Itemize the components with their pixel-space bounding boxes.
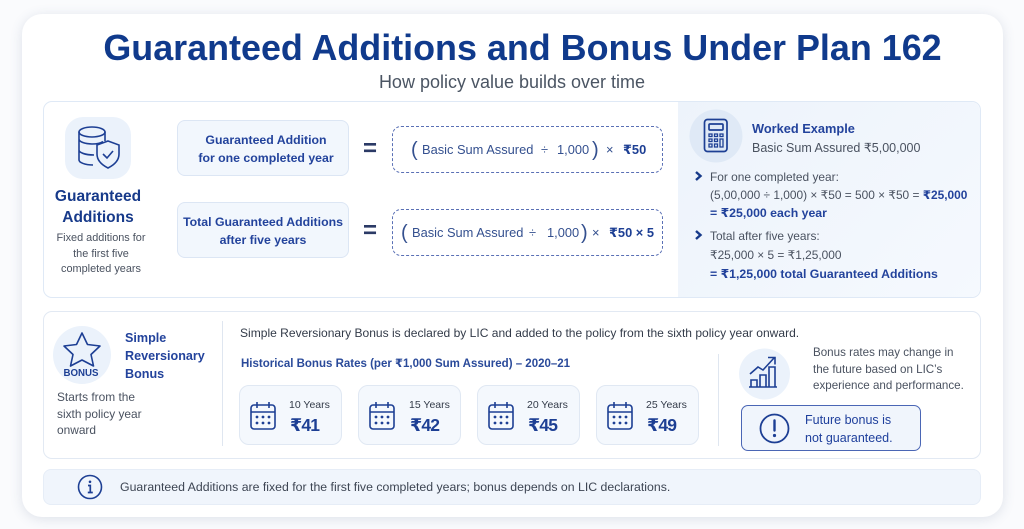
text: five year working: = ₹1,25,000 total Guaranteed Additions <box>710 266 938 280</box>
text: bonus declaration: Simple Reversionary Bonus is declared by LIC and added to the policy from the sixth policy year onward. <box>240 326 799 340</box>
label: total guaranteed additions: after five years <box>220 233 306 247</box>
formula: five years: 1,000 <box>547 225 579 240</box>
tile: 15 years: ₹42 <box>410 415 439 435</box>
text: fixed additions description: Fixed additions for <box>56 232 146 244</box>
text: footer message: Guaranteed Additions are fixed for the first five completed years; bonus depends on LIC declarations. <box>120 480 670 494</box>
heading: guaranteed additions: Additions <box>62 209 134 226</box>
icon: bonus star: BONUS <box>64 368 99 379</box>
text: starts from sixth year: sixth policy year <box>57 406 142 420</box>
heading: guaranteed additions: Guaranteed <box>55 188 141 205</box>
formula: one year: 1,000 <box>557 142 589 157</box>
text: basic sum assured: Basic Sum Assured ₹5,00,000 <box>752 141 920 155</box>
heading: simple reversionary bonus: Reversionary <box>125 349 205 363</box>
equals sign one: = <box>363 135 377 162</box>
icon: calculator <box>690 110 742 162</box>
formula: one year: ( <box>411 139 418 161</box>
heading: worked example: Worked Example <box>752 121 855 136</box>
formula: one year: × <box>606 142 614 157</box>
icon: database with shield <box>65 117 131 179</box>
text: starts from sixth year: onward <box>57 423 96 437</box>
text: one year working: (5,00,000 ÷ 1,000) × ₹50 = 500 × ₹50 = ₹25,000 <box>710 188 967 202</box>
text: fixed additions description <box>56 232 146 275</box>
heading: historical bonus rates: Historical Bonus Rates (per ₹1,000 Sum Assured) – 2020–21 <box>241 358 570 370</box>
icon: info <box>78 474 102 500</box>
panel: simple reversionary bonus <box>43 311 981 459</box>
text: one year working: = ₹25,000 each year <box>710 206 827 220</box>
heading: simple reversionary bonus: Bonus <box>125 367 164 381</box>
tile: 25 years: 25 Years <box>646 399 687 411</box>
icon: chevron two <box>695 230 702 240</box>
text: bonus rates may change: experience and performance. <box>813 379 964 392</box>
tile: 20 years <box>477 385 580 445</box>
formula: one year <box>392 126 663 173</box>
text: starts from sixth year <box>57 390 142 437</box>
icon: growth chart <box>739 348 790 400</box>
heading: simple reversionary bonus: Simple <box>125 331 166 345</box>
tile: 20 years: ₹45 <box>528 415 557 435</box>
text: one year working <box>710 170 967 220</box>
label: guaranteed addition one year <box>177 120 349 176</box>
tile: 10 years: ₹41 <box>290 415 319 435</box>
formula: five years: ( <box>401 222 408 244</box>
text: bonus rates may change <box>813 346 964 392</box>
formula: five years <box>392 209 663 256</box>
formula: one year: ₹50 <box>623 142 646 157</box>
tile: 15 years: 15 Years <box>409 399 450 411</box>
text: five year working: Total after five years: <box>710 228 820 242</box>
text: fixed additions description: the first five <box>73 248 129 260</box>
heading: simple reversionary bonus <box>125 331 205 381</box>
formula: one year: ) <box>592 139 599 161</box>
tile: 20 years: 20 Years <box>527 399 568 411</box>
formula: five years: × <box>592 225 600 240</box>
formula: five years: ) <box>581 222 588 244</box>
tile: 25 years: ₹49 <box>647 415 676 435</box>
formula: one year: ÷ <box>541 142 548 157</box>
heading: guaranteed additions <box>55 188 141 226</box>
title: Guaranteed Additions and Bonus Under Plan 162 <box>103 28 942 68</box>
tile: 15 years <box>358 385 461 445</box>
formula: five years: ÷ <box>529 225 536 240</box>
equals sign two: = <box>363 217 377 244</box>
callout: future bonus not guaranteed <box>741 405 921 451</box>
text: callout message: not guaranteed. <box>805 430 893 444</box>
text: starts from sixth year: Starts from the <box>57 390 135 404</box>
subtitle: How policy value builds over time <box>379 72 645 92</box>
footer note bar <box>43 469 981 505</box>
panel: guaranteed additions <box>43 101 981 298</box>
text: callout message: Future bonus is <box>805 413 891 427</box>
icon: bonus star <box>53 326 111 384</box>
text: callout message <box>805 413 893 444</box>
icon: exclamation <box>760 414 790 444</box>
text: one year working: For one completed year: <box>710 170 839 184</box>
tile: 10 years: 10 Years <box>289 399 330 411</box>
label: guaranteed addition one year: for one completed year <box>198 151 334 165</box>
label: total guaranteed additions: Total Guaranteed Additions <box>183 215 343 229</box>
text: five year working: ₹25,000 × 5 = ₹1,25,000 <box>710 248 842 262</box>
formula: five years: Basic Sum Assured <box>412 225 523 240</box>
text: bonus rates may change: Bonus rates may change in <box>813 346 954 359</box>
formula: five years: ₹50 × 5 <box>609 225 654 240</box>
text: fixed additions description: completed years <box>61 263 141 275</box>
text: bonus rates may change: the future based on LIC’s <box>813 362 942 376</box>
icon: chevron one <box>695 171 702 181</box>
tile: 25 years <box>596 385 699 445</box>
formula: one year: Basic Sum Assured <box>422 142 533 157</box>
tile: 10 years <box>239 385 342 445</box>
panel: worked example <box>678 102 980 297</box>
label: guaranteed addition one year: Guaranteed Addition <box>205 133 327 147</box>
text: five year working <box>710 228 938 280</box>
label: total guaranteed additions <box>177 202 349 258</box>
